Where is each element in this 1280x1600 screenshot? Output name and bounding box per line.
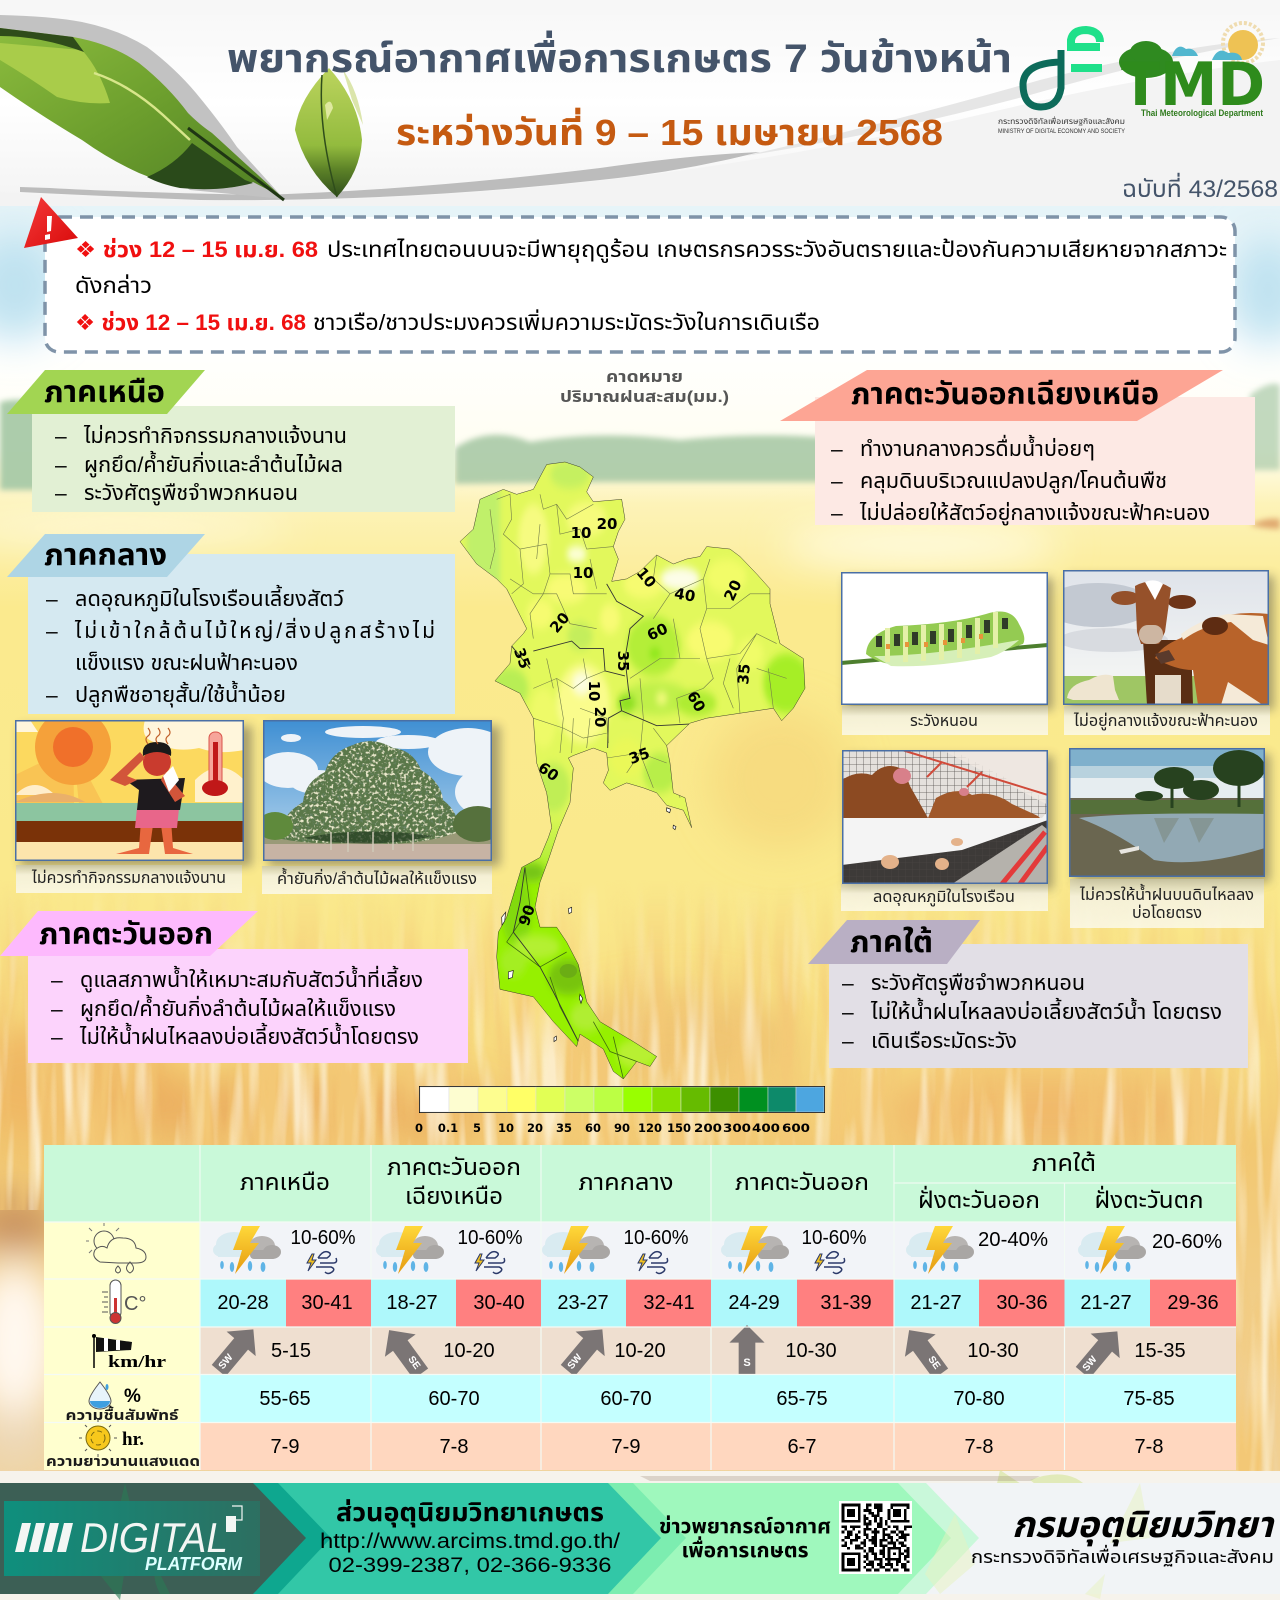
panel: central region: ลดอุณหภูมิในโรงเรือนเลี้ยงสัตว์ <box>75 584 344 612</box>
humidity row <box>200 1374 1236 1422</box>
logo: ministry of digital economy and society: MINISTRY OF DIGITAL ECONOMY AND SOCIETY <box>998 128 1126 135</box>
panel: south region: – <box>842 1001 854 1024</box>
temperature row: 23-27 <box>557 1292 609 1314</box>
map rainfall labels: 10 <box>571 524 591 542</box>
weather row: 10-60% <box>290 1227 356 1249</box>
map rainfall labels: 10 <box>633 564 660 591</box>
panel: south region: ระวังศัตรูพืชจำพวกหนอน <box>871 972 1085 996</box>
humidity row: 65-75 <box>776 1388 828 1410</box>
table header row: ฝั่งตะวันตก <box>1094 1185 1204 1213</box>
weather row: 20-40% <box>978 1229 1048 1251</box>
map rainfall labels: 60 <box>644 619 671 644</box>
digital platform badge: PLATFORM <box>145 1554 243 1574</box>
panel: north region <box>7 370 455 512</box>
photo: fruit tree <box>257 720 515 866</box>
legend title: คาดหมาย <box>606 369 683 386</box>
panel: south region: ภาคใต้ <box>850 926 933 959</box>
panel: central region: ปลูกพืชอายุสั้น/ใช้น้ำน้อย <box>75 680 286 708</box>
photo: caterpillar <box>841 572 1053 710</box>
table header row <box>44 1145 1236 1222</box>
sunshine row: 7-8 <box>440 1436 468 1458</box>
icon: big green leaf <box>0 15 284 200</box>
sunshine row <box>200 1422 1236 1470</box>
sunshine row: 7-9 <box>612 1436 640 1458</box>
panel: northeast region: ไม่ปล่อยให้สัตว์อยู่กลางแจ้งขณะฟ้าคะนอง <box>859 501 1210 526</box>
wind row: 5-15 <box>271 1340 311 1362</box>
photo: cows <box>1043 570 1274 710</box>
icon: sunshine hours: hr. <box>122 1429 144 1450</box>
caption: no outdoor work <box>16 865 242 893</box>
subtitle: date range: ระหว่างวันที่ 9 – 15 เมษายน 2568 <box>396 107 943 153</box>
legend: rainfall colour scale: 200 <box>694 1121 722 1135</box>
icon: small green leaf <box>295 68 363 197</box>
panel: central region: แข็งแรง ขณะฝนฟ้าคะนอง <box>75 650 298 675</box>
icon: sunshine hours: ความยาวนานแสงแดด <box>46 1453 200 1469</box>
icon: thermometer: C° <box>124 1293 146 1315</box>
logo: ministry of digital economy and society <box>998 30 1126 135</box>
legend: rainfall colour scale: 90 <box>614 1121 630 1135</box>
footer banner <box>0 1483 1280 1600</box>
panel: east region: ผูกยึด/ค้ำยันกิ่งลำต้นไม้ผลให้แข็งแรง <box>80 994 396 1022</box>
wind row <box>200 1317 1236 1385</box>
panel: east region: ไม่ให้น้ำฝนไหลลงบ่อเลี้ยงสัตว์น้ำโดยตรง <box>79 1022 419 1049</box>
weather row: 10-60% <box>624 1227 689 1249</box>
panel: south region: ไม่ให้น้ำฝนไหลลงบ่อเลี้ยงสัตว์น้ำ โดยตรง <box>870 997 1222 1024</box>
map rainfall labels <box>510 515 754 928</box>
wind row: SW <box>217 1352 236 1372</box>
legend title: ปริมาณฝนสะสม(มม.) <box>560 389 729 406</box>
wind row: S <box>743 1357 751 1369</box>
wind row: 10-20 <box>443 1340 495 1362</box>
QR code <box>839 1501 912 1574</box>
news label beside QR code <box>659 1516 831 1562</box>
contact: agrometeorology division: http://www.arcims.tmd.go.th/ <box>320 1530 620 1553</box>
weather row <box>200 1222 1236 1279</box>
title: พยากรณ์อากาศเพื่อการเกษตร 7 วันข้างหน้า <box>227 30 1012 81</box>
panel: central region: ภาคกลาง <box>44 539 167 572</box>
caption: avoid runoff into pond: บ่อโดยตรง <box>1132 904 1202 922</box>
caption: keep animals in during storms: ไม่อยู่กลางแจ้งขณะฟ้าคะนอง <box>1073 712 1258 730</box>
panel: north region: – <box>55 482 67 505</box>
panel: north region: – <box>55 454 67 477</box>
table header row: ภาคเหนือ <box>240 1169 330 1195</box>
legend: rainfall colour scale: 10 <box>498 1121 514 1135</box>
map rainfall labels: 40 <box>673 584 697 606</box>
table header row: ภาคใต้ <box>1032 1150 1096 1176</box>
icon: sunshine hours <box>46 1419 200 1469</box>
table header row: ภาคตะวันออก <box>387 1154 521 1180</box>
logo: Thai Meteorological Department: Thai Meteorological Department <box>1141 108 1263 118</box>
panel: east region: – <box>51 969 63 992</box>
panel: east region: ภาคตะวันออก <box>39 918 213 951</box>
legend: rainfall colour scale: 600 <box>782 1121 810 1135</box>
humidity row: 70-80 <box>953 1388 1005 1410</box>
legend title <box>560 369 729 406</box>
panel: south region: – <box>842 972 854 995</box>
legend: rainfall colour scale: 0.1 <box>438 1121 458 1135</box>
wind row: 10-20 <box>614 1340 666 1362</box>
news label beside QR code: เพื่อการเกษตร <box>682 1536 808 1562</box>
map rainfall labels: 60 <box>683 688 709 715</box>
panel: weather alert: ประเทศไทยตอนบนจะมีพายุฤดูร้อน เกษตรกรควรระวังอันตรายและป้องกันความเสียหายจากสภาวะ <box>327 237 1227 263</box>
photo: heat illustration <box>15 709 252 866</box>
legend: rainfall colour scale: 150 <box>667 1121 691 1135</box>
wind row: 10-30 <box>785 1340 837 1362</box>
wind row: SW <box>566 1352 585 1372</box>
temperature row: 18-27 <box>386 1292 438 1314</box>
map rainfall labels: 90 <box>515 902 539 928</box>
panel: weather alert: ❖ ช่วง 12 – 15 เม.ย. 68 <box>75 310 306 335</box>
table header row: ภาคตะวันออก <box>735 1169 869 1195</box>
logo: Thai Meteorological Department: TMD <box>1121 50 1265 120</box>
map rainfall labels: 35 <box>614 651 632 671</box>
panel: northeast region <box>780 370 1255 526</box>
temperature row: 29-36 <box>1167 1292 1219 1314</box>
caption: lower temperature in housing <box>841 884 1048 911</box>
caption: avoid runoff into pond: ไม่ควรให้น้ำฝนบนดินไหลลง <box>1079 883 1254 904</box>
row label column <box>44 1222 200 1470</box>
map rainfall labels: 20 <box>720 577 745 604</box>
panel: east region: – <box>51 998 63 1021</box>
legend: rainfall colour scale: 35 <box>556 1121 572 1135</box>
panel: northeast region: ภาคตะวันออกเฉียงเหนือ <box>851 378 1159 411</box>
header band <box>0 0 1280 206</box>
digital platform badge: DIGITAL <box>80 1514 228 1561</box>
table header row: ฝั่งตะวันออก <box>918 1185 1040 1213</box>
caption: beware caterpillars: ระวังหนอน <box>910 713 978 730</box>
humidity row: 60-70 <box>600 1388 652 1410</box>
panel: north region: ไม่ควรทำกิจกรรมกลางแจ้งนาน <box>83 424 347 448</box>
legend: rainfall colour scale <box>415 1086 825 1135</box>
photo: chickens in coop <box>842 750 1053 889</box>
panel: north region: ภาคเหนือ <box>44 376 165 409</box>
wind row: SW <box>1081 1354 1100 1374</box>
caption: no outdoor work: ไม่ควรทำกิจกรรมกลางแจ้งนาน <box>31 869 226 887</box>
map rainfall labels: 20 <box>546 609 573 636</box>
caption: lower temperature in housing: ลดอุณหภูมิในโรงเรือน <box>873 889 1015 906</box>
caption: avoid runoff into pond <box>1070 879 1264 928</box>
contact: agrometeorology division: ส่วนอุตุนิยมวิทยาเกษตร <box>336 1497 604 1528</box>
temperature row: 32-41 <box>643 1292 695 1314</box>
wind row: SE <box>925 1354 942 1372</box>
icon: thermometer <box>102 1280 146 1324</box>
digital platform badge <box>4 1501 260 1576</box>
panel: northeast region: ทำงานกลางควรดื่มน้ำบ่อยๆ <box>860 434 1095 461</box>
caption: keep animals in during storms <box>1064 706 1270 735</box>
table: regional 7-day forecast <box>44 1145 1236 1470</box>
panel: south region: เดินเรือระมัดระวัง <box>871 1030 1017 1053</box>
icon: humidity: ความชื้นสัมพัทธ์ <box>66 1405 179 1423</box>
legend: rainfall colour scale: 60 <box>585 1121 601 1135</box>
panel: weather alert <box>45 217 1235 352</box>
legend: rainfall colour scale: 5 <box>473 1121 481 1135</box>
temperature row: 21-27 <box>1080 1292 1132 1314</box>
table header row: เฉียงเหนือ <box>405 1183 503 1209</box>
panel: north region: ผูกยึด/ค้ำยันกิ่งและลำต้นไม้ผล <box>84 450 343 478</box>
caption: support fruit trees: ค้ำยันกิ่ง/ลำต้นไม้ผลให้แข็งแรง <box>277 867 477 888</box>
legend: rainfall colour scale: 400 <box>752 1121 780 1135</box>
icon: windsock, km/hr <box>92 1334 167 1371</box>
temperature row: 24-29 <box>728 1292 780 1314</box>
legend: rainfall colour scale: 300 <box>723 1121 751 1135</box>
map rainfall labels: 20 <box>591 707 609 727</box>
sunshine row: 7-8 <box>965 1436 993 1458</box>
legend: rainfall colour scale: 120 <box>638 1121 662 1135</box>
table header row: ภาคกลาง <box>578 1169 674 1195</box>
panel: east region <box>0 911 468 1063</box>
department name <box>971 1504 1275 1567</box>
icon: humidity <box>66 1382 179 1423</box>
news label beside QR code: ข่าวพยากรณ์อากาศ <box>659 1516 831 1538</box>
contact: agrometeorology division: 02-399-2387, 02-366-9336 <box>328 1554 612 1577</box>
map rainfall labels: 35 <box>510 645 534 671</box>
icon: sun and rain cloud <box>86 1223 146 1273</box>
panel: south region: – <box>842 1030 854 1053</box>
temperature row: 21-27 <box>910 1292 962 1314</box>
photo: farm pond <box>1069 748 1270 882</box>
panel: central region: – <box>46 588 58 611</box>
icon: windsock, km/hr: km/hr <box>108 1352 167 1371</box>
map: accumulated rainfall over Thailand <box>460 462 806 1080</box>
sunshine row: 7-9 <box>271 1436 299 1458</box>
weather row: 10-60% <box>458 1227 523 1249</box>
temperature row: 31-39 <box>820 1292 872 1314</box>
map rainfall labels: 10 <box>585 681 603 701</box>
weather row: 10-60% <box>802 1227 867 1249</box>
panel: central region: – <box>46 620 58 643</box>
caption: beware caterpillars <box>842 706 1048 735</box>
sunshine row: 6-7 <box>788 1436 816 1458</box>
temperature row: 20-28 <box>217 1292 269 1314</box>
humidity row: 55-65 <box>259 1388 311 1410</box>
wind row: 15-35 <box>1134 1340 1186 1362</box>
icon: warning triangle <box>24 197 78 248</box>
panel: east region: ดูแลสภาพน้ำให้เหมาะสมกับสัตว์น้ำที่เลี้ยง <box>80 965 423 993</box>
panel: northeast region: – <box>831 438 843 461</box>
logo: Thai Meteorological Department <box>1119 23 1265 120</box>
issue number: ฉบับที่ 43/2568 <box>1122 172 1278 203</box>
department name: กระทรวงดิจิทัลเพื่อเศรษฐกิจและสังคม <box>971 1544 1274 1567</box>
panel: weather alert: ❖ ช่วง 12 – 15 เม.ย. 68 <box>75 237 318 262</box>
map rainfall labels: 60 <box>535 758 562 785</box>
map rainfall labels: 35 <box>734 663 754 685</box>
temperature row: 30-41 <box>301 1292 353 1314</box>
icon: humidity: % <box>124 1386 141 1407</box>
wind row: SE <box>405 1354 422 1372</box>
panel: north region: ระวังศัตรูพืชจำพวกหนอน <box>84 482 298 506</box>
department name: กรมอุตุนิยมวิทยา <box>1012 1504 1275 1547</box>
legend: rainfall colour scale: 20 <box>527 1121 543 1135</box>
map rainfall labels: 10 <box>573 564 593 582</box>
panel: weather alert: ดังกล่าว <box>75 273 152 298</box>
map rainfall labels: 35 <box>626 744 652 768</box>
humidity row: 60-70 <box>428 1388 480 1410</box>
caption: support fruit trees <box>262 866 492 894</box>
legend: rainfall colour scale: 0 <box>415 1121 423 1135</box>
contact: agrometeorology division <box>320 1497 620 1577</box>
weather row: 20-60% <box>1152 1231 1222 1253</box>
panel: east region: – <box>51 1026 63 1049</box>
humidity row: 75-85 <box>1123 1388 1175 1410</box>
logo: ministry of digital economy and society: กระทรวงดิจิทัลเพื่อเศรษฐกิจและสังคม <box>998 116 1125 126</box>
temperature row <box>200 1279 1236 1327</box>
panel: northeast region: – <box>831 470 843 493</box>
map rainfall labels: 20 <box>597 515 617 533</box>
panel: weather alert: ชาวเรือ/ชาวประมงควรเพิ่มความระมัดระวังในการเดินเรือ <box>313 308 820 335</box>
temperature row: 30-40 <box>473 1292 525 1314</box>
panel: north region: – <box>55 425 67 448</box>
wind row: 10-30 <box>967 1340 1019 1362</box>
panel: northeast region: – <box>831 502 843 525</box>
sunshine row: 7-8 <box>1135 1436 1163 1458</box>
panel: south region <box>808 920 1248 1068</box>
panel: central region <box>7 534 455 714</box>
panel: northeast region: คลุมดินบริเวณแปลงปลูก/โคนต้นพืช <box>860 469 1167 494</box>
temperature row: 30-36 <box>996 1292 1048 1314</box>
panel: central region: ไม่เข้าใกล้ต้นไม้ใหญ่/สิ่งปลูกสร้างไม่ <box>74 617 435 644</box>
panel: central region: – <box>46 684 58 707</box>
